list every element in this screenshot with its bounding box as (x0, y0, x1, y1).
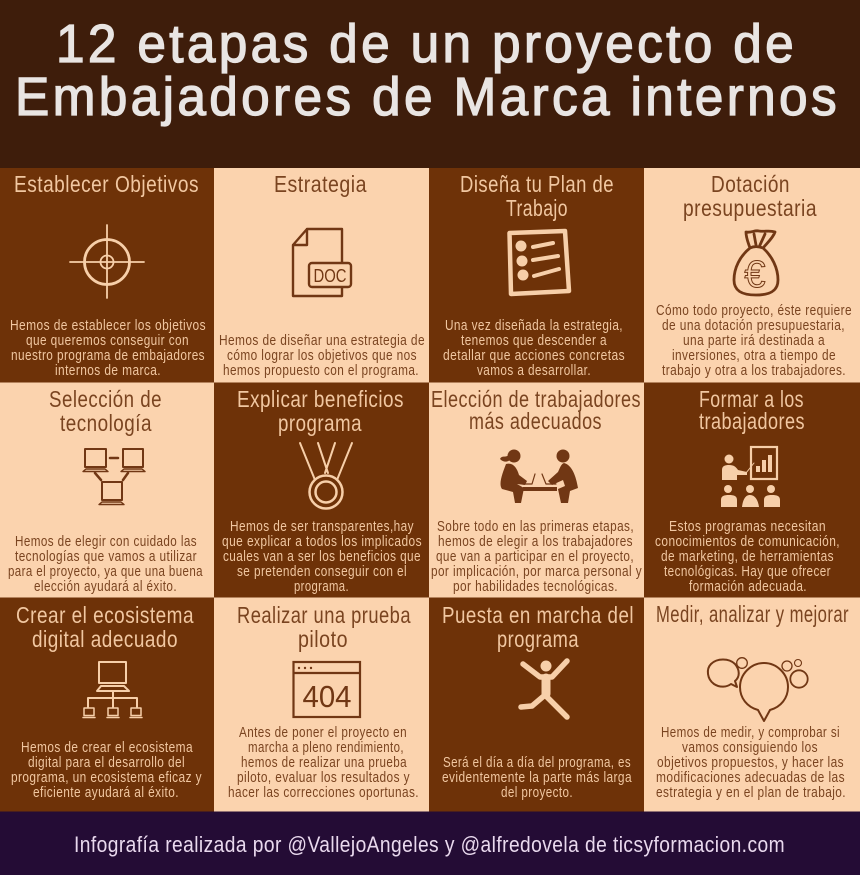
text: trabajadores: Sobre todo en las primeras etapas, (437, 519, 634, 535)
text: tecnología: para el proyecto, ya que una buena (8, 564, 203, 580)
footer band (0, 812, 860, 875)
text: trabajadores: por habilidades tecnológicas. (453, 579, 618, 595)
heading: Elección de trabajadores: más adecuados (469, 408, 602, 434)
text: medir (656, 725, 846, 801)
heading: Realizar una prueba piloto (237, 602, 411, 652)
panel: Ecosistema digital (0, 598, 214, 812)
text: estrategia (219, 333, 425, 379)
text: beneficios (222, 519, 422, 595)
panel: Plan de Trabajo (429, 168, 644, 382)
text: dotación (656, 303, 852, 379)
icon: medal (300, 443, 352, 508)
text: objetivos: nuestro programa de embajadores (11, 348, 205, 364)
heading: Dotación presupuestaria: presupuestaria (683, 195, 817, 221)
text: plan (443, 318, 625, 379)
heading: Puesta en marcha del programa: programa (497, 626, 579, 652)
title: Embajadores de Marca internos (15, 67, 840, 127)
heading: Selección de tecnología (49, 386, 162, 436)
text: plan: detallar que acciones concretas (443, 348, 625, 364)
title (15, 14, 840, 127)
header band (0, 0, 860, 169)
icon: networked laptops (83, 449, 145, 504)
text: objetivos: internos de marca. (55, 363, 161, 379)
panel: Explicar beneficios (214, 382, 429, 598)
text: formar: formación adecuada. (689, 579, 807, 595)
icon: 404 window: 404 (302, 679, 352, 714)
heading: Selección de tecnología: Selección de (49, 386, 162, 412)
heading: Selección de tecnología: tecnología (60, 410, 152, 436)
text: beneficios: programa. (294, 579, 349, 595)
icon: DOC file (293, 229, 351, 296)
text: ecosistema: Hemos de crear el ecosistema (21, 740, 193, 756)
text: beneficios: Hemos de ser transparentes,hay (230, 519, 414, 535)
text: ecosistema: digital para el desarrollo del (28, 755, 185, 771)
panel: Medir, analizar y mejorar (644, 598, 860, 812)
text: ecosistema: eficiente ayudará al éxito. (33, 785, 179, 801)
text: piloto: piloto, evaluar los resultados y (237, 770, 410, 786)
text: tecnología: tecnologías que vamos a utilizar (15, 549, 197, 565)
text: estrategia: Hemos de diseñar una estrategia de (219, 333, 425, 349)
panel: Dotación presupuestaria (644, 168, 860, 382)
text: trabajadores: que van a participar en el proyecto, (436, 549, 634, 565)
heading: Elección de trabajadores (431, 386, 641, 434)
heading: Explicar beneficios programa: programa (278, 410, 362, 436)
heading: Diseña tu Plan de Trabajo: Trabajo (506, 195, 568, 221)
heading: Crear el ecosistema digital adecuado (16, 602, 194, 652)
text: trabajadores: hemos de elegir a los trabajadores (438, 534, 633, 550)
text: objetivos (10, 318, 206, 379)
text: dotación: una parte irá destinada a (683, 333, 825, 349)
heading: Formar a los trabajadores: trabajadores (699, 408, 805, 434)
icon: DOC file: DOC (314, 266, 346, 286)
text: tecnología (8, 534, 203, 595)
text: piloto: Antes de poner el proyecto en (239, 725, 407, 741)
text: formar (655, 519, 840, 595)
heading: Dotación presupuestaria (683, 171, 817, 221)
text: plan: tenemos que descender a (461, 333, 607, 349)
icon: training presentation (721, 447, 780, 507)
panel: Estrategia (214, 168, 429, 382)
icon: computer network (83, 662, 142, 718)
heading: Formar a los trabajadores (699, 386, 805, 434)
text: trabajadores: por implicación, por marca personal y (431, 564, 642, 580)
heading: Diseña tu Plan de Trabajo: Diseña tu Plan de (460, 171, 614, 197)
text: plan: Una vez diseñada la estrategia, (445, 318, 623, 334)
heading: Explicar beneficios programa: Explicar beneficios (237, 386, 404, 412)
panel: Elección de trabajadores (429, 382, 644, 598)
heading: Realizar una prueba piloto: Realizar una prueba (237, 602, 411, 628)
icon: speech bubbles (708, 658, 808, 721)
heading: Crear el ecosistema digital adecuado: Crear el ecosistema (16, 602, 194, 628)
text: tecnología: Hemos de elegir con cuidado las (15, 534, 197, 550)
text: trabajadores (431, 519, 642, 595)
text: objetivos: Hemos de establecer los objetivos (10, 318, 206, 334)
heading: Dotación presupuestaria: Dotación (711, 171, 790, 197)
panel: Establecer Objetivos (0, 168, 214, 382)
text: formar: Estos programas necesitan (669, 519, 826, 535)
heading: Realizar una prueba piloto: piloto (298, 626, 348, 652)
text: estrategia: hemos propuesto con el programa. (223, 363, 419, 379)
heading: Establecer Objetivos: Establecer Objetivos (14, 171, 199, 197)
text: piloto: hemos de realizar una prueba (241, 755, 407, 771)
heading: Puesta en marcha del programa (442, 602, 634, 652)
panel: Formar a los trabajadores (644, 382, 860, 598)
text: piloto: marcha a pleno rendimiento, (248, 740, 404, 756)
text: puesta en marcha (442, 755, 632, 801)
heading: Formar a los trabajadores: Formar a los (699, 386, 804, 412)
text: beneficios: cuales van a ser los beneficios que (223, 549, 421, 565)
heading: Diseña tu Plan de Trabajo (460, 171, 614, 221)
icon: jumping figure (521, 660, 567, 717)
text: puesta en marcha: Será el día a día del programa, es (443, 755, 631, 771)
text: objetivos: que queremos conseguir con (26, 333, 189, 349)
heading: Crear el ecosistema digital adecuado: digital adecuado (32, 626, 178, 652)
text: tecnología: elección ayudará al éxito. (34, 579, 177, 595)
panel: Puesta en marcha (429, 598, 644, 812)
text: beneficios: se pretenden conseguir con el (237, 564, 407, 580)
text: plan: vamos a desarrollar. (477, 363, 591, 379)
text: estrategia: cómo lograr los objetivos que nos (227, 348, 417, 364)
heading: Elección de trabajadores: Elección de trabajadores (431, 386, 641, 412)
icon: target (70, 225, 144, 298)
heading: Estrategia: Estrategia (274, 171, 367, 197)
icon: money bag (734, 231, 778, 296)
icon: 404 window (294, 662, 360, 717)
heading: Explicar beneficios programa (237, 386, 404, 436)
icon: checklist (510, 231, 569, 294)
text: medir: vamos consiguiendo los (682, 740, 818, 756)
text: beneficios: que explicar a todos los implicados (222, 534, 422, 550)
title: 12 etapas de un proyecto de (56, 14, 797, 74)
icon: two people at table (500, 450, 578, 503)
panel: Selección de tecnología (0, 382, 214, 598)
text: puesta en marcha: evidentemente la parte más larga (442, 770, 632, 786)
icon: money bag: € (744, 254, 766, 296)
text: ecosistema: programa, un ecosistema eficaz y (11, 770, 202, 786)
text: piloto (228, 725, 419, 801)
panel: Prueba piloto (214, 598, 429, 812)
text: ecosistema (11, 740, 202, 801)
text: puesta en marcha: del proyecto. (501, 785, 573, 801)
text: piloto: hacer las correcciones oportunas. (228, 785, 419, 801)
heading: Puesta en marcha del programa: Puesta en marcha del (442, 602, 634, 628)
